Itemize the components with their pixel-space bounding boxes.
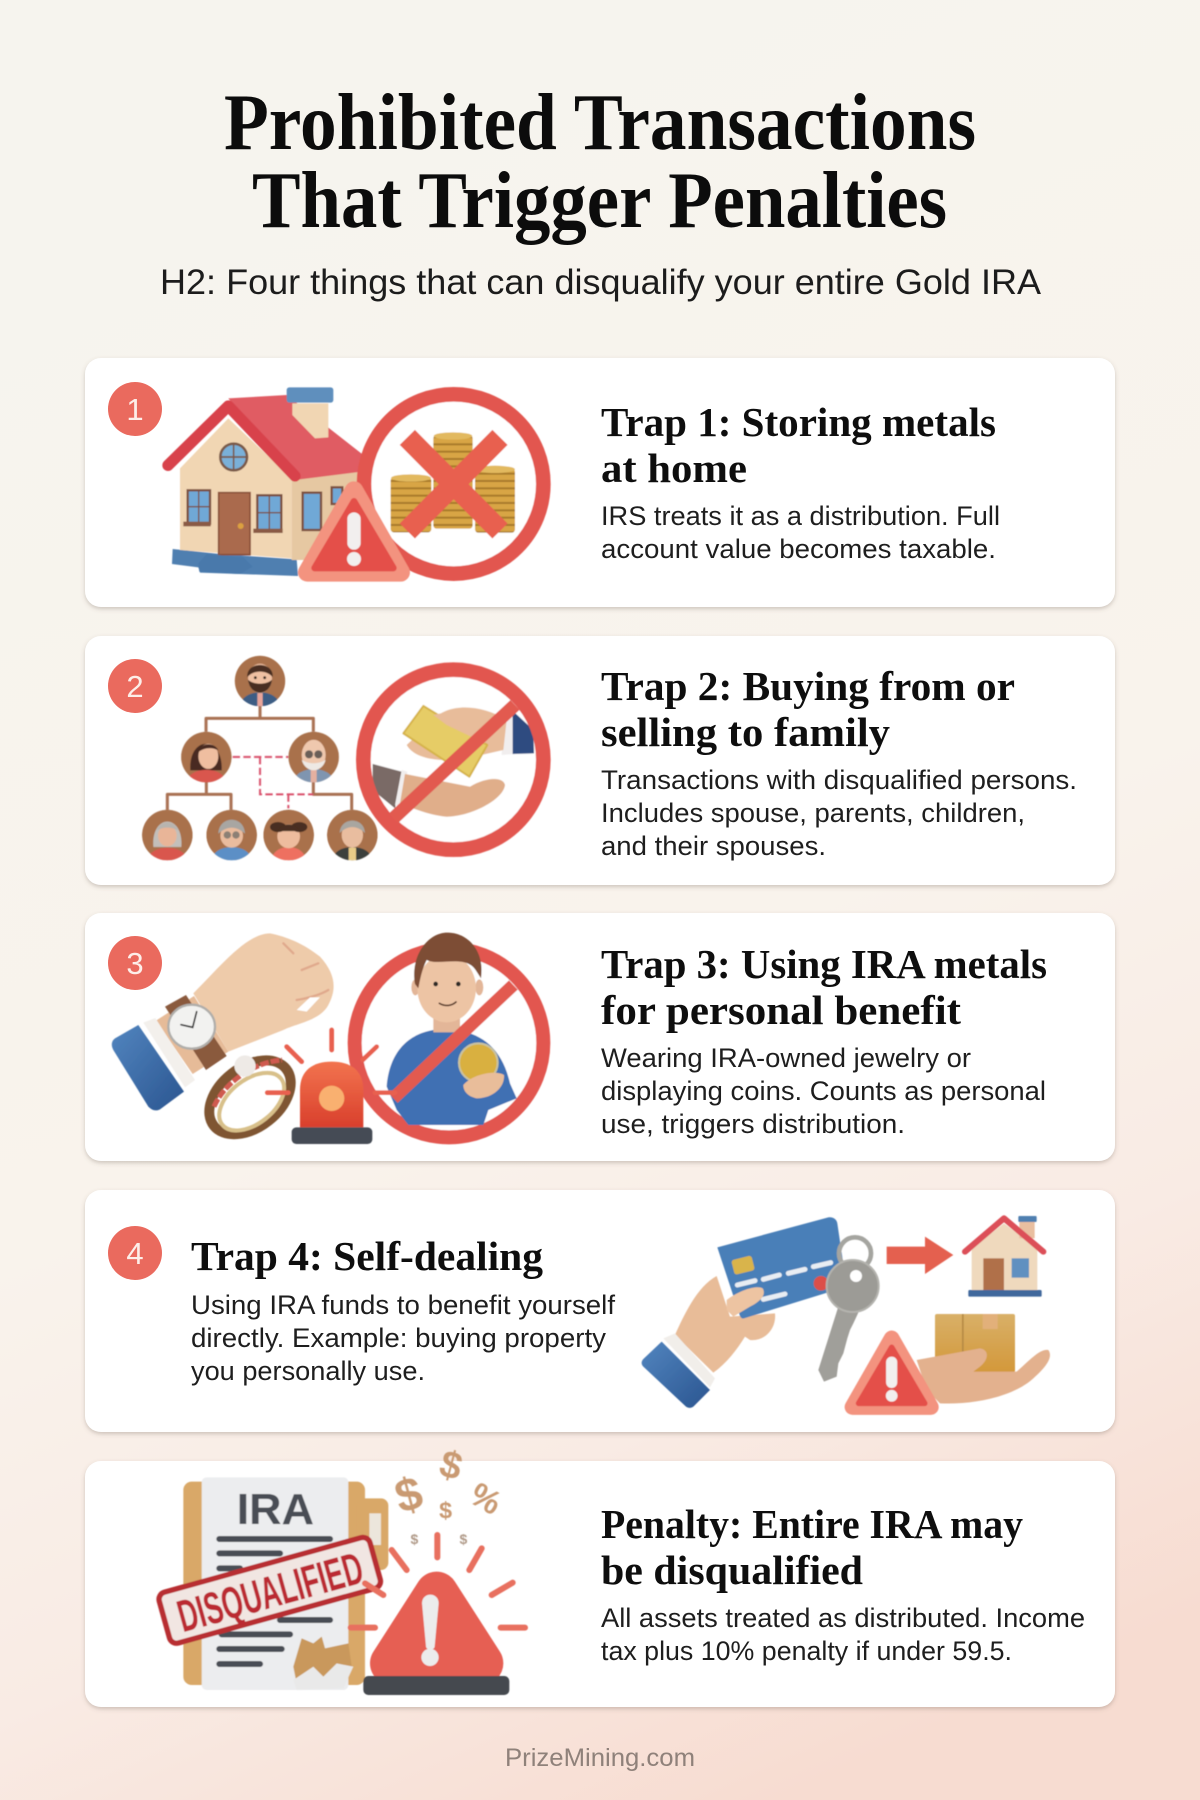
panel: trap 3 using IRA metals for personal benefit <box>85 913 1115 1161</box>
heading: selling to family <box>601 709 891 755</box>
description: Wearing IRA-owned jewelry or <box>601 1043 971 1073</box>
icon: flying money symbols: % <box>463 1476 507 1523</box>
description: and their spouses. <box>601 831 826 861</box>
family tree connectors <box>167 705 352 810</box>
icon: flying money symbols: $ <box>459 1531 467 1547</box>
icon: alarm beacon <box>267 1030 395 1144</box>
portrait: man in dark suit <box>326 809 378 862</box>
description: tax plus 10% penalty if under 59.5. <box>601 1636 1012 1666</box>
illustration: disqualified IRA document and warning <box>157 1442 525 1695</box>
heading <box>601 663 1015 755</box>
heading: Trap 2: Buying from or <box>601 663 1015 709</box>
icon: warning triangle <box>307 491 401 572</box>
description <box>601 1603 1085 1666</box>
icon: flying money symbols: $ <box>435 1442 467 1489</box>
heading <box>601 1501 1023 1593</box>
description <box>191 1290 616 1386</box>
description <box>601 501 1000 564</box>
icon: warning triangle <box>852 1338 931 1407</box>
description: IRS treats it as a distribution. Full <box>601 501 1000 531</box>
description: directly. Example: buying property <box>191 1323 607 1353</box>
icon: large warning alarm <box>351 1535 525 1695</box>
stamp: disqualified: DISQUALIFIED <box>172 1542 369 1642</box>
description: use, triggers distribution. <box>601 1109 905 1139</box>
description: Using IRA funds to benefit yourself <box>191 1290 616 1320</box>
icon: prohibited ring with person <box>355 933 543 1137</box>
heading: for personal benefit <box>601 987 961 1033</box>
description: Transactions with disqualified persons. <box>601 765 1077 795</box>
heading: Trap 3: Using IRA metals <box>601 941 1047 987</box>
portrait: bearded man <box>234 655 286 707</box>
arrow <box>887 1237 953 1274</box>
illustration: house with prohibited coins <box>168 387 543 576</box>
title: That Trigger Penalties <box>252 157 947 245</box>
icon: flying money symbols: $ <box>389 1466 428 1523</box>
portrait: grandmother <box>141 809 194 862</box>
description <box>601 765 1077 861</box>
portrait: older man with glasses <box>288 731 340 783</box>
heading: Trap 1: Storing metals <box>601 399 996 445</box>
number badge 4 <box>108 1226 162 1280</box>
panel: trap 4 self-dealing <box>85 1190 1115 1432</box>
icon: house <box>168 387 363 576</box>
number badge 2 <box>108 659 162 713</box>
number badge 3 <box>108 936 162 990</box>
number badge 3: 3 <box>126 946 144 981</box>
panel: trap 1 storing metals at home <box>85 358 1115 607</box>
heading: Trap 4: Self-dealing <box>191 1233 543 1279</box>
icon: gold ring <box>195 1045 305 1149</box>
description: Includes spouse, parents, children, <box>601 798 1025 828</box>
title: Prohibited Transactions <box>224 79 976 167</box>
illustration: card, key, house and warning <box>642 1216 1050 1408</box>
icon: prohibited ring with coins <box>364 394 543 574</box>
illustration: family tree and prohibited handover <box>142 656 543 872</box>
icon: key <box>818 1237 879 1382</box>
number badge 4: 4 <box>126 1236 144 1271</box>
illustration: watch, ring, alarm and person <box>112 933 543 1149</box>
portrait: child <box>262 808 315 862</box>
panel: penalty disqualified <box>85 1442 1115 1707</box>
portrait: grandfather with glasses <box>206 809 258 862</box>
icon: hand with watch <box>112 933 334 1110</box>
subtitle: H2: Four things that can disqualify your entire Gold IRA <box>160 263 1042 302</box>
description: displaying coins. Counts as personal <box>601 1076 1046 1106</box>
heading <box>601 941 1047 1033</box>
description: All assets treated as distributed. Income <box>601 1603 1085 1633</box>
icon: prohibited cash handover <box>363 670 543 850</box>
icon: hand with box <box>917 1314 1050 1404</box>
description: account value becomes taxable. <box>601 534 996 564</box>
description: you personally use. <box>191 1356 425 1386</box>
heading: at home <box>601 445 747 491</box>
icon: flying money symbols <box>389 1442 507 1547</box>
heading: be disqualified <box>601 1547 863 1593</box>
stamp: disqualified <box>157 1536 382 1646</box>
heading <box>601 399 996 491</box>
number badge 1 <box>108 382 162 436</box>
icon: flying money symbols: $ <box>410 1531 418 1547</box>
icon: hand holding card <box>642 1217 847 1408</box>
number badge 1: 1 <box>126 392 144 427</box>
footer source: PrizeMining.com <box>505 1744 695 1772</box>
title <box>224 79 976 245</box>
icon: clipboard document <box>183 1477 388 1690</box>
heading: Penalty: Entire IRA may <box>601 1501 1023 1547</box>
icon: flying money symbols: $ <box>439 1497 452 1523</box>
icon: small house <box>965 1216 1043 1297</box>
icon: clipboard document: IRA <box>237 1486 314 1534</box>
portrait: woman <box>180 731 232 783</box>
description <box>601 1043 1046 1139</box>
number badge 2: 2 <box>126 669 144 704</box>
panel: trap 2 buying from or selling to family <box>85 636 1115 885</box>
